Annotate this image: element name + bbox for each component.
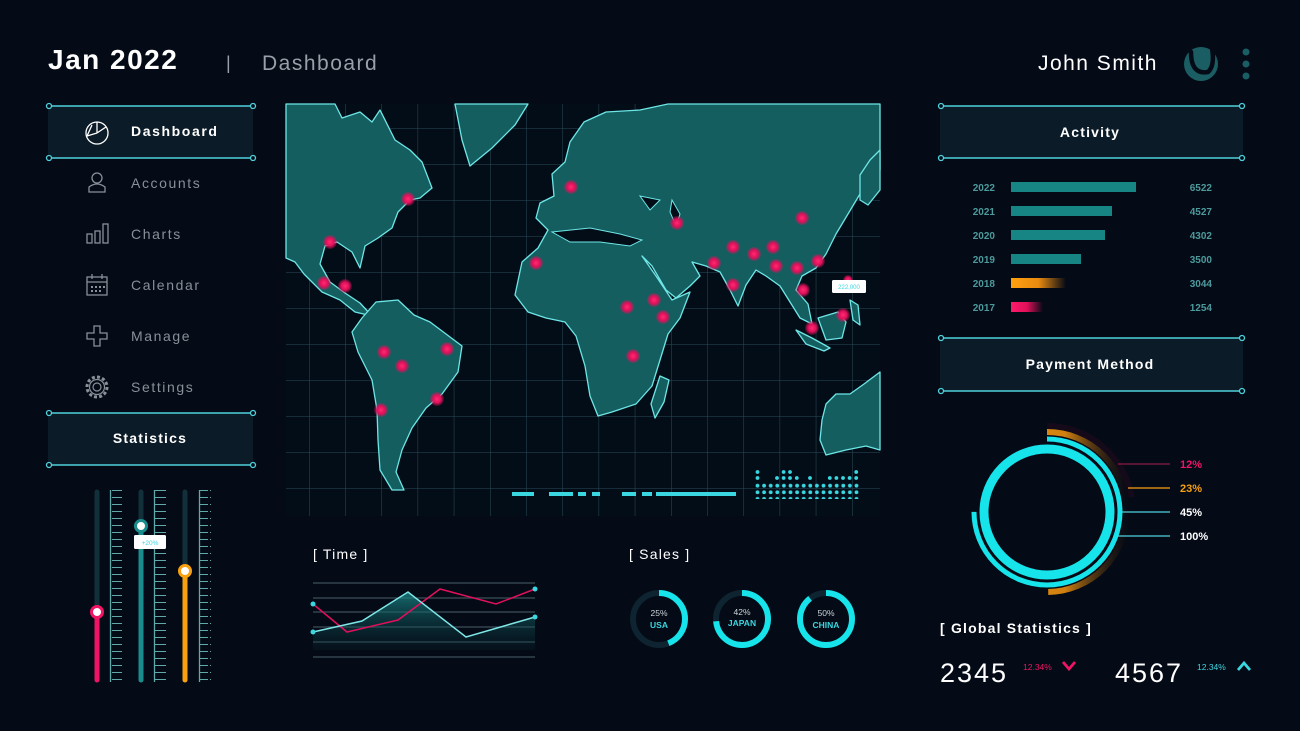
chart: payment rings (961, 426, 1208, 598)
nav: dashboard active: Dashboard (131, 123, 219, 139)
global statistics: [ Global Statistics ] (940, 620, 1092, 636)
donut: USA (633, 593, 685, 645)
header: user name: John Smith (1038, 52, 1158, 75)
nav: settings (87, 377, 194, 397)
nav: dashboard active (46, 104, 256, 160)
chart: payment rings: 100% (1180, 531, 1208, 543)
world map (286, 104, 880, 516)
map progress bar (512, 492, 736, 496)
bar chart: activity: 2019 (973, 255, 995, 266)
bar chart: activity: 4302 (1190, 231, 1212, 242)
chart: time: [ Time ] (313, 546, 368, 562)
chart: payment rings: 12% (1180, 459, 1202, 471)
chart: payment rings: 23% (1180, 483, 1202, 495)
panel: payment method header: Payment Method (1026, 356, 1154, 372)
map pins (317, 180, 853, 417)
donut: CHINA (800, 593, 852, 645)
bar chart: activity: 3500 (1190, 255, 1212, 266)
donut: CHINA: 50% (817, 608, 835, 618)
header: title: Dashboard (262, 52, 378, 75)
inland seas (552, 196, 680, 246)
chart: sales donuts (629, 546, 852, 645)
leader lines & labels (1117, 464, 1170, 536)
bar chart: activity: 3044 (1190, 279, 1212, 290)
map callout: 222,000 (838, 285, 860, 291)
nav: manage: Manage (131, 328, 191, 344)
global statistics (940, 620, 1250, 688)
chart: payment rings: 45% (1180, 507, 1202, 519)
icon: avatar (1184, 47, 1218, 81)
nav: settings: Settings (131, 379, 194, 395)
tag: +20%: +20% (142, 540, 159, 547)
bar chart: activity: 2022 (973, 183, 995, 194)
donut: USA: USA (650, 620, 668, 630)
rulers (110, 490, 211, 682)
stat: 4567 up (1115, 658, 1250, 688)
bar chart: activity: 2021 (973, 207, 995, 218)
bar chart: activity (973, 182, 1212, 314)
stat: 2345 down: 12.34% (1023, 662, 1052, 672)
stat: 4567 up: 4567 (1115, 658, 1183, 688)
panel: payment method header (938, 336, 1244, 394)
icon: menu dots (1242, 48, 1250, 80)
donut: CHINA: CHINA (813, 620, 839, 630)
panel: statistics header (46, 410, 256, 468)
map callout (832, 280, 866, 293)
sidebar navigation (46, 104, 256, 397)
bar chart: activity: 1254 (1190, 303, 1212, 314)
donut: JAPAN (716, 593, 768, 645)
stat: 2345 down (940, 658, 1075, 688)
bar chart: activity: 4527 (1190, 207, 1212, 218)
donut: JAPAN: JAPAN (728, 618, 756, 628)
tag: +20% (134, 535, 166, 549)
bar chart: activity: 2018 (973, 279, 995, 290)
bar chart: activity: 6522 (1190, 183, 1212, 194)
panel: activity header: Activity (1060, 124, 1120, 140)
sliders (92, 490, 211, 682)
map dot matrix (755, 470, 861, 499)
bar chart: activity: 2020 (973, 231, 995, 242)
stat: 2345 down: 2345 (940, 658, 1008, 688)
donut: JAPAN: 42% (733, 607, 751, 617)
chart: time (310, 546, 538, 657)
nav: charts (87, 224, 182, 243)
header: title: Jan 2022 (48, 44, 178, 75)
header: title: | (226, 53, 231, 73)
bar chart: activity: 2017 (973, 303, 995, 314)
nav: accounts: Accounts (131, 175, 201, 191)
stat: 4567 up: 12.34% (1197, 662, 1226, 672)
slider knobs (92, 520, 190, 618)
nav: charts: Charts (131, 226, 182, 242)
header: title (48, 44, 378, 75)
panel: activity header (938, 104, 1244, 160)
nav: manage (87, 326, 191, 346)
continents (286, 104, 880, 490)
nav: accounts (89, 173, 201, 192)
panel: statistics header: Statistics (113, 430, 187, 446)
nav: calendar (87, 274, 201, 295)
donut: USA: 25% (650, 608, 668, 618)
chart: sales donuts: [ Sales ] (629, 546, 690, 562)
nav: calendar: Calendar (131, 277, 201, 293)
